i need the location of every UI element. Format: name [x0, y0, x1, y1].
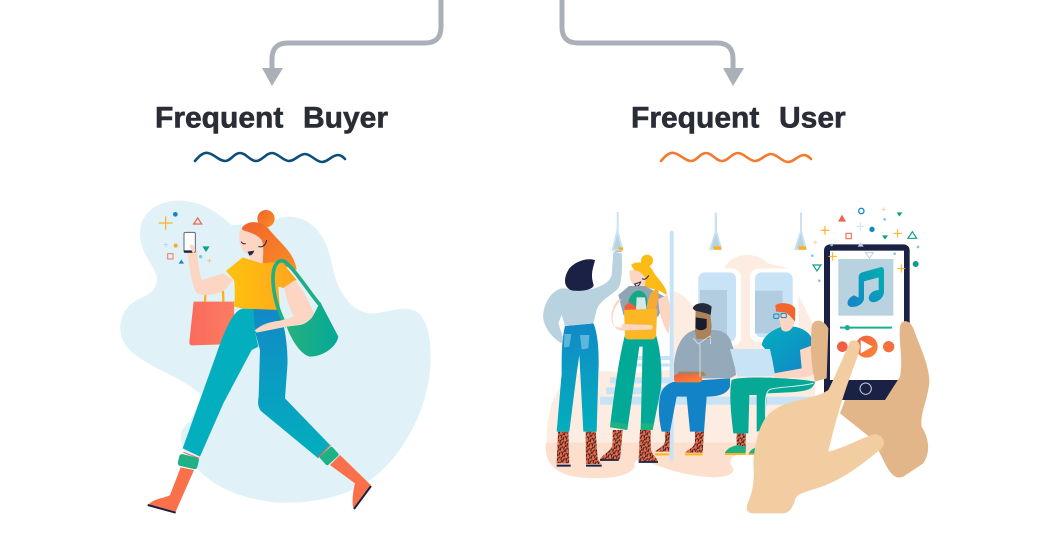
pole — [670, 231, 674, 461]
squiggle: orange divider — [661, 153, 811, 162]
shirt — [226, 257, 297, 310]
front leg — [183, 309, 258, 457]
illustration: subway passengers with phone — [543, 207, 929, 513]
boots — [148, 445, 371, 513]
heading: Frequent User: Frequent — [631, 102, 759, 134]
rear leg — [253, 309, 330, 458]
seated man with beard — [655, 303, 736, 454]
heading: Frequent User: User — [779, 102, 846, 134]
strap handles right — [710, 213, 806, 250]
heading: Frequent Buyer: Frequent — [155, 102, 283, 134]
raised arm — [187, 247, 233, 295]
shoulder bag — [273, 261, 338, 357]
seat — [600, 397, 813, 405]
background: peach shapes — [547, 290, 730, 443]
illustration: woman shopping with phone — [120, 201, 431, 513]
woman with groceries — [600, 255, 670, 462]
face — [239, 229, 267, 264]
background blob — [120, 201, 431, 503]
confetti — [159, 212, 211, 264]
arrow: to frequent buyer — [262, 0, 441, 86]
heading: Frequent Buyer: Buyer — [303, 102, 388, 134]
album cover with music note — [838, 259, 893, 316]
back hand holding phone — [811, 321, 929, 478]
player buttons — [837, 336, 894, 358]
floor band — [546, 443, 770, 478]
squiggle: blue divider — [195, 153, 345, 162]
confetti around phone — [811, 207, 919, 282]
seat slats — [606, 356, 670, 394]
player slider — [840, 325, 892, 330]
home button — [860, 383, 871, 394]
front hand pressing play — [747, 340, 884, 513]
standing woman from behind — [543, 242, 622, 466]
arrow: to frequent user — [562, 0, 744, 86]
strap handles — [612, 212, 721, 250]
hair back and bun — [242, 210, 297, 270]
carriage wall and windows — [697, 255, 815, 443]
seated man with laptop — [725, 303, 815, 454]
phone — [824, 244, 910, 400]
arm in pocket — [255, 280, 314, 333]
shopping bag — [189, 280, 235, 345]
phone — [184, 232, 195, 254]
